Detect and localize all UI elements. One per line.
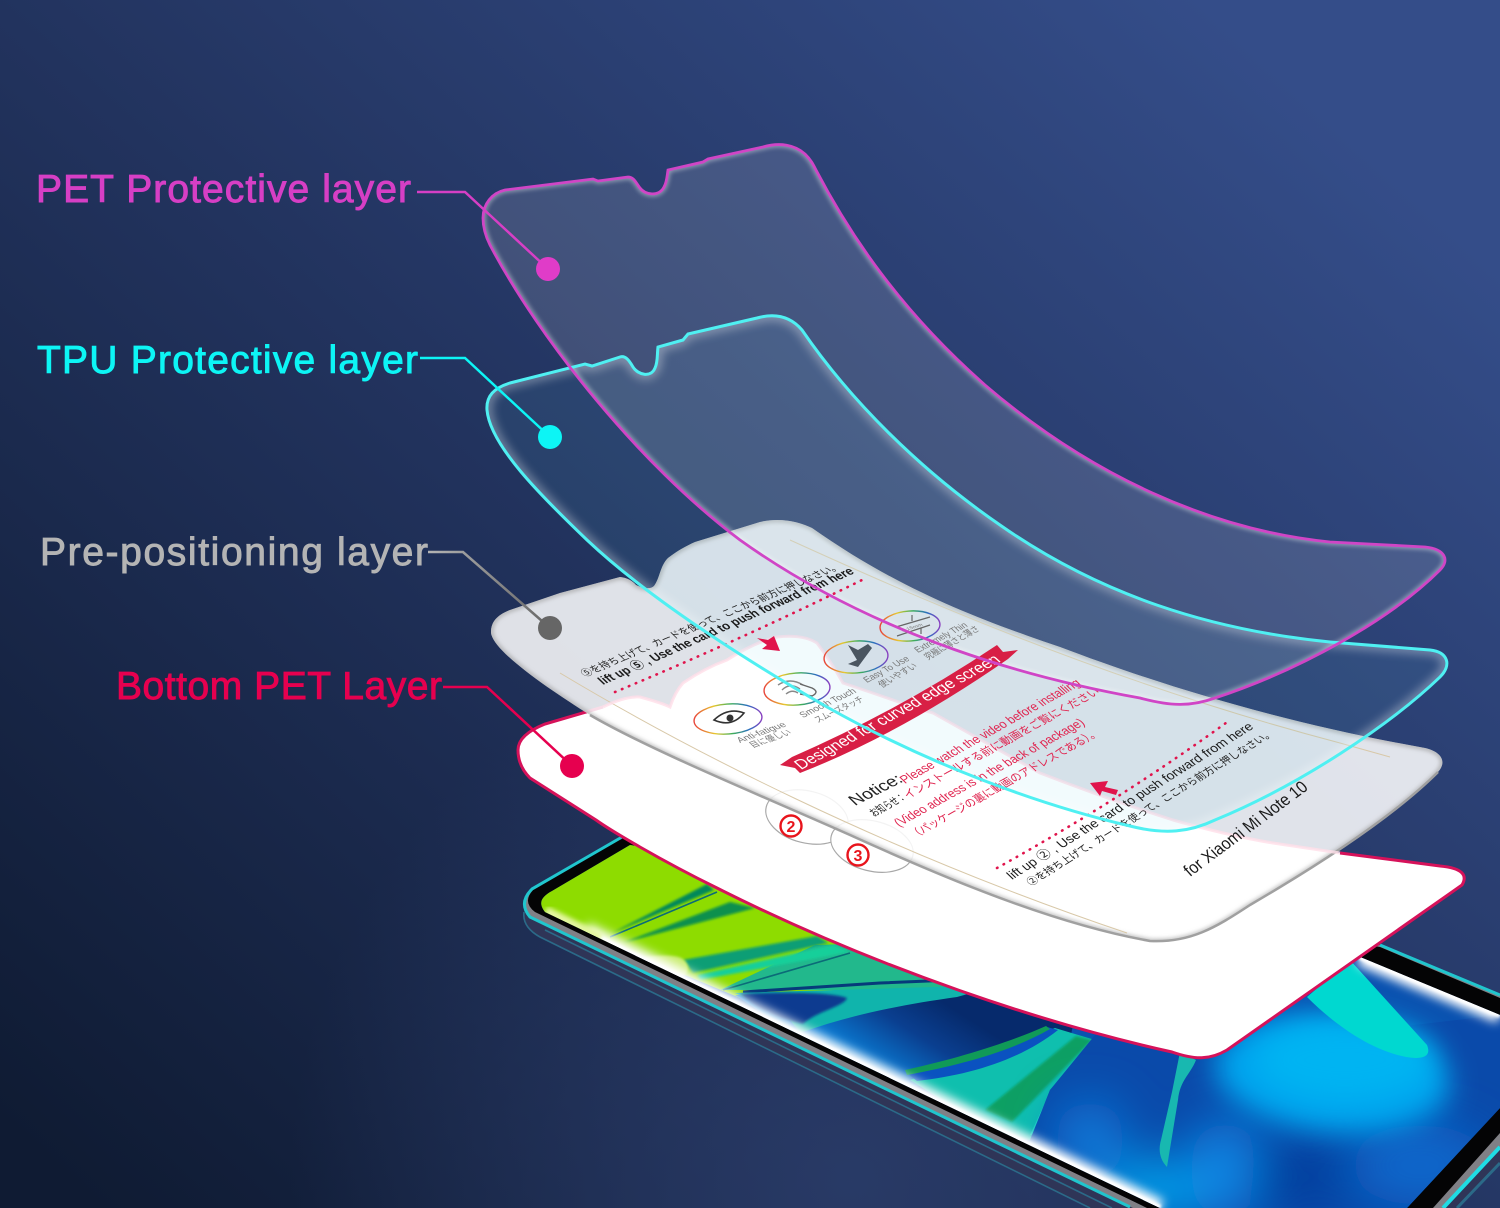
phone corner-right reflection — [1443, 1147, 1500, 1208]
callout: pre-positioning layer — [40, 531, 562, 640]
callout: PET protective layer — [36, 168, 560, 281]
PET layer film — [483, 145, 1445, 704]
icon: extremely thin: 0.15mm — [901, 623, 925, 633]
thin label: 究極に薄さと薄さ — [921, 623, 982, 662]
notice Japanese — [866, 685, 1103, 819]
thin label: Extremely Thin — [912, 621, 970, 655]
dot — [536, 257, 560, 281]
top red arrow — [757, 636, 780, 651]
notice heading: Notice: — [844, 770, 907, 809]
icon: fingerprint touch — [763, 671, 831, 707]
green field — [541, 845, 836, 998]
green rays — [610, 884, 850, 980]
tab 3: 3 — [854, 848, 863, 865]
label: Pre-positioning layer — [40, 531, 428, 574]
leader line — [417, 192, 548, 269]
teal-green field — [720, 944, 945, 990]
label: Bottom PET Layer — [116, 665, 442, 708]
tab 2: 2 — [787, 819, 796, 836]
red banner: Designed for curved edge screen — [790, 651, 1004, 773]
video address Japanese: （パッケージの裏に動画のアドレスである）。 — [906, 727, 1103, 841]
streak fields — [910, 1028, 1095, 1140]
deep blue field — [735, 990, 1080, 1090]
dark blue lobe — [740, 993, 847, 1024]
cyan glow core — [1255, 1020, 1435, 1100]
TPU layer film — [487, 316, 1447, 831]
leader line — [420, 358, 550, 437]
screen edge core — [600, 939, 1500, 1208]
screen edge glow — [585, 931, 1500, 1208]
phone screen wallpaper — [541, 845, 1500, 1208]
lower instruction English: lift up ② , Use the card to push forward from here — [1004, 720, 1256, 882]
phone — [522, 836, 1500, 1208]
lower dotted line — [997, 720, 1230, 868]
navy line — [742, 980, 933, 993]
notice Japanese: お知らせ： — [866, 791, 909, 819]
phone bottom edge — [1443, 1147, 1500, 1208]
tab 2 — [760, 782, 854, 852]
icon: eye — [693, 702, 763, 736]
cyan glow — [1209, 1005, 1455, 1145]
bottom PET layer sheet — [518, 636, 1464, 1058]
screen corner pale glow — [545, 912, 600, 939]
leader line — [443, 687, 572, 766]
phone frame edges — [524, 837, 1500, 1207]
leader line — [428, 552, 550, 628]
PET layer outline — [483, 145, 1445, 704]
model name: for Xiaomi Mi Note 10 — [1179, 777, 1312, 880]
dot — [538, 425, 562, 449]
dot — [538, 616, 562, 640]
easy label: 使いやすい — [875, 660, 920, 690]
card print — [577, 560, 1312, 888]
pre-positioning layer sheet — [491, 520, 1442, 941]
right blue fields — [1030, 1015, 1500, 1208]
icon: easy to use check — [823, 639, 889, 675]
icon: extremely thin — [879, 609, 941, 643]
top dotted line — [615, 580, 862, 692]
teal lobe — [1307, 960, 1428, 1058]
notice Japanese: インストールする前に動画をご覧にください — [900, 685, 1103, 801]
top instruction English: lift up ⑤ , Use the card to push forward from here — [595, 565, 857, 687]
callout: bottom PET layer — [116, 665, 584, 778]
phone reflection lines — [524, 912, 1112, 1208]
callout: TPU protective layer — [37, 339, 562, 449]
phone body — [524, 837, 1500, 1208]
dot — [560, 754, 584, 778]
label: PET Protective layer — [36, 168, 411, 211]
pull tabs — [760, 782, 919, 880]
phone bottom reflection edge — [1457, 1163, 1500, 1208]
touch label: スムーズタッチ — [811, 694, 867, 725]
thin dark rays — [610, 892, 850, 990]
tab 3 — [825, 812, 919, 880]
easy label: Easy To Use — [861, 654, 912, 685]
label: TPU Protective layer — [37, 339, 418, 382]
phone black bezel — [528, 838, 1500, 1208]
lower instruction Japanese: ②を持ち上げて、カードを使って、ここから前方に押しなさい。 — [1023, 727, 1277, 888]
eye label: Anti-fatigue — [735, 721, 789, 745]
eye label: 目に優しい — [746, 727, 795, 750]
touch label: Smooth Touch — [797, 687, 859, 720]
teal sliver — [1160, 1052, 1196, 1167]
teal wave — [735, 986, 966, 1032]
lime blob — [643, 956, 688, 977]
notice red text: Please watch the video before installing — [897, 676, 1084, 786]
phone lower reflection band — [524, 905, 1135, 1208]
video address text: (Video address is in the back of package) — [891, 716, 1088, 829]
lower red arrow — [1090, 781, 1118, 796]
TPU layer outline — [487, 316, 1447, 831]
top instruction Japanese: ⑤を持ち上げて、カードを使って、ここから前方に押しなさい。 — [577, 560, 844, 679]
